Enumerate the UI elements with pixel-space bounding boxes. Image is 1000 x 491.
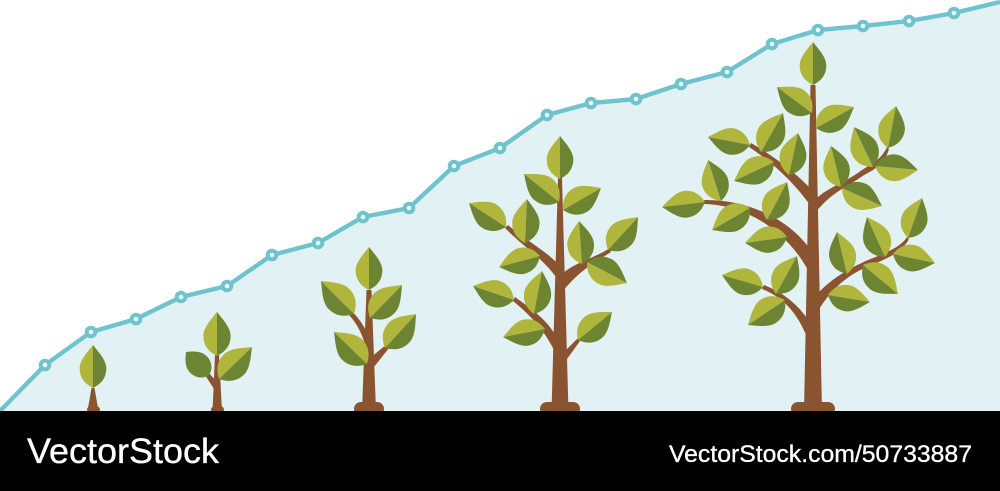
footer band <box>0 411 1000 491</box>
tree stage 4: medium tree <box>462 136 648 416</box>
tree stage 5: large tree <box>660 42 938 416</box>
tree stage 3: young tree <box>311 247 427 416</box>
tree stage 2: sapling <box>178 312 262 414</box>
tree stage 1: seedling <box>80 345 106 414</box>
watermark url text: VectorStock.com/50733887 <box>669 441 972 468</box>
watermark logo text: VectorStock <box>27 432 220 471</box>
